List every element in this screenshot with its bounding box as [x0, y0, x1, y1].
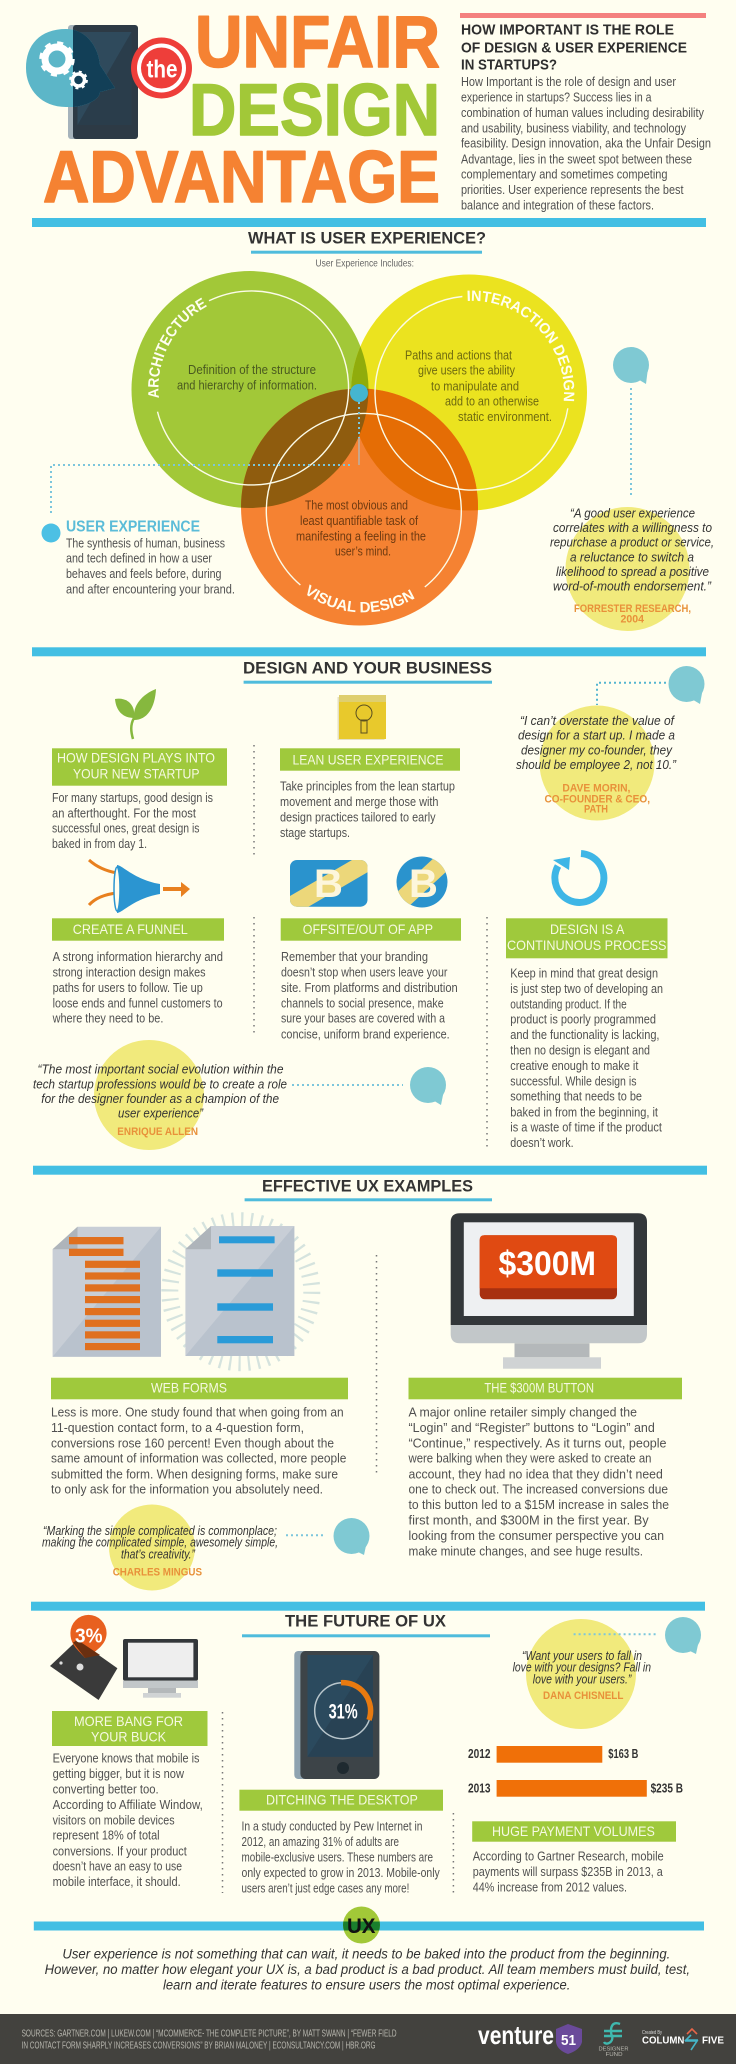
quote: dana chisnell: DANA CHISNELL [543, 1690, 624, 1702]
block: offsite out of app: channels to social presence, make [281, 996, 444, 1010]
intro text: experience in startups? Success lies in a [461, 90, 652, 104]
quote: dave morin: “I can’t overstate the value of [520, 714, 675, 728]
quote: dave morin: design for a start up. I made a [518, 729, 675, 743]
logo: column five: COLUMN [642, 2034, 684, 2046]
block: web forms: same amount of information was collected, more people [51, 1452, 346, 1466]
text: interaction [405, 348, 552, 424]
block: the $300M button: make minute changes, and see huge results. [408, 1544, 643, 1558]
block: create a funnel [52, 918, 224, 1026]
block: design is a continuous process: outstanding product. If the [510, 997, 627, 1011]
intro heading: OF DESIGN & USER EXPERIENCE [461, 39, 687, 56]
text: architecture: and hierarchy of information. [177, 378, 317, 392]
block: huge payment volumes: According to Gartner Research, mobile [473, 1850, 664, 1864]
panel: effective ux examples [33, 1166, 707, 1590]
intro text [461, 75, 711, 212]
block: design is a continuous process: successful. While design is [510, 1074, 636, 1088]
block: create a funnel: where they need to be. [52, 1012, 163, 1026]
label: architecture: ARCHITECTURE [148, 298, 207, 398]
heading: THE FUTURE OF UX [285, 1613, 446, 1631]
block: offsite out of app: doesn’t stop when users leave your [281, 966, 447, 980]
icon: b card and b circle [290, 856, 448, 908]
block: design is a continuous process: doesn’t work. [510, 1136, 574, 1150]
heading [242, 1613, 490, 1637]
bar chart: payment volumes: $163 B [608, 1747, 638, 1761]
block: the $300M button: were balking when they were asked to create an [408, 1452, 652, 1466]
block: design is a continuous process: creative enough to make it [510, 1059, 639, 1073]
quote: forrester research: word-of-mouth endorsement.” [553, 580, 712, 594]
icon: ux badge [343, 1906, 380, 1944]
quote: dave morin: designer my co-founder, they [521, 743, 673, 757]
block: design is a continuous process: something that needs to be [510, 1090, 642, 1104]
callout: user experience: and after encountering your brand. [66, 582, 235, 596]
block: design is a continuous process: DESIGN IS A [550, 921, 625, 937]
block: web forms [51, 1378, 348, 1497]
block: the $300M button: “Login” and “Register” buttons to “Login” and [408, 1421, 655, 1435]
quote: forrester research: “A good user experience [570, 506, 695, 520]
block: web forms: conversions rose 160 percent! Even though about the [51, 1436, 334, 1450]
title [43, 2, 440, 218]
block: more bang for your buck: visitors on mobile devices [53, 1813, 175, 1827]
block: more bang for your buck [52, 1711, 208, 1889]
icon: leaf [115, 689, 156, 739]
panel: what is user experience [32, 218, 714, 631]
block: design is a continuous process: then no design is elegant and [510, 1044, 650, 1058]
quote: enrique allen: user experience” [118, 1107, 204, 1121]
block: design is a continuous process: is a waste of time if the product [510, 1121, 662, 1135]
text: interaction: give users the ability [418, 364, 516, 378]
title: UNFAIR [195, 2, 440, 83]
block: web forms: 11-question contact form, to a 4-question form, [51, 1421, 304, 1435]
block: create a funnel: paths for users to follow. Tie up [53, 981, 203, 995]
block: the $300M button: “Continue,” respectively. As it turns out, people [408, 1436, 666, 1450]
quote: dana chisnell: love with your designs? Fall in [513, 1661, 651, 1675]
block: ditching the desktop: DITCHING THE DESKTOP [266, 1792, 418, 1808]
quote: charles mingus: making the complicated simple, awesomely simple, [42, 1536, 278, 1550]
icon: b card and b circle: B [314, 862, 343, 906]
quote: enrique allen: ENRIQUE ALLEN [117, 1126, 198, 1138]
closing text: However, no matter how elegant your UX is, a bad product is a bad product. All team members must build, test, [45, 1962, 690, 1977]
logo: designer fund: FUND [606, 2052, 623, 2058]
block: more bang for your buck: MORE BANG FOR [74, 1713, 183, 1729]
text: visual: manifesting a feeling in the [296, 529, 426, 543]
block: lean user experience: movement and merge those with [280, 795, 438, 809]
callout: user experience [42, 465, 350, 596]
block: design is a continuous process: CONTINUNOUS PROCESS [507, 937, 666, 953]
block: ditching the desktop: users aren’t just edge cases any more! [242, 1881, 409, 1895]
block: more bang for your buck: converting better too. [53, 1783, 159, 1797]
icon: cycle arrow [553, 854, 604, 902]
icon: light bulb note [338, 695, 386, 740]
block: offsite out of app: Remember that your branding [281, 950, 428, 964]
block: create a funnel: CREATE A FUNNEL [73, 921, 188, 937]
heading [245, 1178, 492, 1201]
heading: DESIGN AND YOUR BUSINESS [243, 659, 492, 677]
block: more bang for your buck: conversions. If your product [53, 1844, 187, 1858]
quote: dave morin: CO-FOUNDER & CEO, [544, 794, 650, 806]
icon: the badge [131, 38, 192, 98]
quote: forrester research: 2004 [620, 613, 644, 625]
closing text [45, 1947, 690, 1992]
icon: the badge: the [146, 55, 178, 83]
quote: enrique allen: tech startup professions would be to create a role [33, 1077, 287, 1091]
block: the $300M button [408, 1378, 682, 1558]
quote: dave morin: PATH [584, 804, 608, 816]
label: visual design: VISUAL DESIGN [307, 584, 414, 612]
block: offsite out of app: site. From platforms and distribution [281, 981, 458, 995]
block: the $300M button: first month, and $300M in the first year. By [408, 1513, 649, 1527]
text: architecture [177, 363, 317, 392]
block: how design plays: baked in from day 1. [52, 837, 147, 851]
quote: dana chisnell: “Want your users to fall in [522, 1649, 642, 1663]
logo: column five: Created By [642, 2030, 662, 2036]
callout: user experience: behaves and feels before, during [66, 567, 222, 581]
quote: forrester research: repurchase a product or service, [550, 536, 714, 550]
block: lean user experience: LEAN USER EXPERIENCE [292, 751, 444, 767]
panel: design and your business [32, 647, 706, 1150]
quote: forrester research: a reluctance to switch a [570, 550, 694, 564]
block: huge payment volumes: 44% increase from 2012 values. [473, 1880, 627, 1894]
block: offsite out of app: sure your bases are covered with a [281, 1012, 445, 1026]
callout: user experience: USER EXPERIENCE [66, 518, 200, 535]
icon: monitor with $300M button: $300M [498, 1245, 596, 1283]
text: architecture: Definition of the structure [188, 363, 316, 377]
block: more bang for your buck: Everyone knows that mobile is [53, 1752, 199, 1766]
block: lean user experience: design practices tailored to early [280, 811, 436, 825]
block: more bang for your buck: mobile interface, it should. [53, 1875, 181, 1889]
block: web forms: submitted the form. When designing forms, make sure [51, 1467, 338, 1481]
intro text: How Important is the role of design and user [461, 75, 676, 89]
heading: EFFECTIVE UX EXAMPLES [262, 1178, 473, 1196]
block: the $300M button: account, they had no idea that they didn’t need [408, 1467, 663, 1481]
quote: dave morin: DAVE MORIN, [562, 783, 630, 795]
block: more bang for your buck: getting bigger, but it is now [53, 1767, 185, 1781]
block: offsite out of app [281, 918, 461, 1041]
block: more bang for your buck: doesn’t have an easy to use [53, 1860, 182, 1874]
icon: ux badge: UX [347, 1915, 376, 1938]
logo: venture 51: venture [478, 2020, 554, 2050]
block: ditching the desktop: 2012, an amazing 31% of adults are [242, 1835, 399, 1849]
icon: tilted phone with 3% pin: 3% [75, 1626, 103, 1648]
block: huge payment volumes [472, 1821, 676, 1894]
block: the $300M button: one to check out. The increased conversions due [408, 1483, 668, 1497]
quote: forrester research: correlates with a willingness to [553, 521, 712, 535]
block: design is a continuous process [506, 918, 668, 1150]
block: offsite out of app: concise, uniform brand experience. [281, 1027, 450, 1041]
intro heading: IN STARTUPS? [461, 57, 557, 74]
block: create a funnel: strong interaction design makes [53, 966, 206, 980]
logo: venture 51: 51 [561, 2032, 576, 2049]
quote: forrester research [550, 347, 714, 631]
block: the $300M button: looking from the consumer perspective you can [408, 1529, 664, 1543]
intro text: Advantage, lies in the sweet spot between these [461, 152, 692, 166]
intro heading [461, 22, 687, 74]
heading: WHAT IS USER EXPERIENCE? [248, 230, 486, 248]
block: lean user experience [280, 748, 460, 840]
panel: the future of ux [31, 1602, 705, 1895]
block: more bang for your buck: YOUR BUCK [91, 1729, 167, 1745]
sources: IN CONTACT FORM SHARPLY INCREASES CONVERSIONS” BY BRIAN MALONEY | ECONSULTANCY.COM | HBR.ORG [22, 2040, 376, 2051]
block: huge payment volumes: payments will surpass $235B in 2013, a [473, 1865, 663, 1879]
text: interaction: add to an otherwise [445, 395, 539, 409]
venn diagram [132, 271, 587, 626]
quote: charles mingus: CHARLES MINGUS [113, 1566, 202, 1578]
text: interaction: Paths and actions that [405, 348, 512, 362]
quote: dave morin [516, 666, 704, 820]
quote: charles mingus: that’s creativity.” [121, 1547, 196, 1561]
block: create a funnel: loose ends and funnel customers to [53, 996, 223, 1010]
accent bar [460, 13, 706, 18]
icon: funnel [89, 860, 190, 913]
text: visual: The most obvious and [305, 498, 408, 512]
quote: dave morin: should be employee 2, not 10.” [516, 758, 677, 772]
quote: charles mingus [42, 1504, 370, 1590]
block: ditching the desktop: In a study conducted by Pew Internet in [242, 1820, 422, 1834]
logo: designer fund [598, 2023, 629, 2058]
block: lean user experience: Take principles from the lean startup [280, 780, 455, 794]
block: the $300M button: THE $300M BUTTON [484, 1380, 594, 1396]
icon: phone with 31% gauge: 31% [329, 1700, 358, 1723]
block: the $300M button: to this button led to a $15M increase in sales the [408, 1498, 669, 1512]
block: web forms: WEB FORMS [151, 1380, 227, 1396]
block: ditching the desktop [239, 1790, 443, 1895]
block: ditching the desktop: only expected to grow in 2013. Mobile-only [242, 1866, 440, 1880]
closing text: learn and iterate features to ensure users the most optimal experience. [163, 1977, 570, 1992]
quote: enrique allen: for the designer founder as a champion of the [41, 1092, 279, 1106]
block: design is a continuous process: and the functionality is lacking, [510, 1028, 660, 1042]
icon: tilted phone with 3% pin [50, 1615, 117, 1700]
block: how design plays: successful ones, great design is [52, 822, 200, 836]
quote: enrique allen: “The most important social evolution within the [38, 1062, 284, 1076]
icon: phone with 31% gauge [294, 1651, 379, 1779]
intro text: and usability, business viability, and technology [461, 121, 687, 135]
block: lean user experience: stage startups. [280, 826, 350, 840]
logo: designer fund: DESIGNER [598, 2047, 629, 2053]
text: visual [296, 498, 426, 559]
block: how design plays: HOW DESIGN PLAYS INTO [57, 750, 215, 766]
quote: charles mingus: “Marking the simple complicated is commonplace; [43, 1524, 277, 1538]
block: web forms: to only ask for the information you absolutely need. [51, 1483, 323, 1497]
title: DESIGN [189, 70, 440, 151]
block: how design plays: YOUR NEW STARTUP [73, 765, 200, 781]
sources [22, 2029, 397, 2051]
text: interaction: to manipulate and [431, 379, 519, 393]
quote: dana chisnell: love with your users.” [533, 1672, 632, 1686]
bar chart: payment volumes: 2013 [468, 1781, 491, 1795]
block: create a funnel: A strong information hierarchy and [53, 950, 223, 964]
logo: column five: FIVE [702, 2034, 724, 2046]
callout: user experience: The synthesis of human, business [66, 536, 225, 550]
block: design is a continuous process: is just step two of developing an [510, 982, 663, 996]
quote: enrique allen [33, 1040, 446, 1150]
subheading: User Experience Includes: [316, 258, 414, 270]
text: visual: least quantifiable task of [300, 514, 418, 528]
block: more bang for your buck: According to Affiliate Window, [53, 1798, 203, 1812]
panel: header [26, 2, 711, 218]
quote: dana chisnell [513, 1617, 701, 1729]
closing text: User experience is not something that can wait, it needs to be baked into the product from the beginning. [62, 1947, 670, 1962]
icon: head and phone with gears [26, 25, 138, 139]
block: design is a continuous process: Keep in mind that great design [510, 966, 658, 980]
text: visual: user’s mind. [335, 545, 391, 559]
block: how design plays: an afterthought. For the most [52, 806, 196, 820]
quote: forrester research: FORRESTER RESEARCH, [574, 603, 691, 615]
sources: SOURCES: GARTNER.COM | LUKEW.COM | “MCOMMERCE- THE COMPLETE PICTURE”, BY MATT SWANN | “FEWER FIELD [22, 2029, 397, 2040]
label: interaction design: INTERACTION DESIGN [468, 290, 574, 402]
title: ADVANTAGE [43, 137, 440, 218]
intro heading: HOW IMPORTANT IS THE ROLE [461, 22, 674, 39]
bar chart: payment volumes [468, 1746, 683, 1797]
icon: monitor with $300M button [451, 1213, 647, 1369]
block: more bang for your buck: represent 18% of total [53, 1829, 160, 1843]
block: how design plays [52, 748, 227, 851]
icon: b card and b circle: B [409, 862, 438, 906]
block: design is a continuous process: baked in from the beginning, it [510, 1105, 658, 1119]
icon: web form documents [53, 1221, 312, 1363]
logo: column five [642, 2029, 724, 2050]
block: offsite out of app: OFFSITE/OUT OF APP [303, 921, 433, 937]
callout: user experience: and tech defined in how a user [66, 552, 212, 566]
block: ditching the desktop: mobile-exclusive users. These numbers are [242, 1851, 433, 1865]
footer [0, 2014, 736, 2064]
intro text: balance and integration of these factors. [461, 198, 654, 212]
bar chart: payment volumes: $235 B [651, 1781, 683, 1795]
quote: forrester research: likelihood to spread a positive [556, 565, 709, 579]
block: huge payment volumes: HUGE PAYMENT VOLUMES [492, 1823, 655, 1839]
block: design is a continuous process: product is poorly programmed [510, 1013, 656, 1027]
bar chart: payment volumes: 2012 [468, 1747, 491, 1761]
text: interaction: static environment. [458, 410, 552, 424]
intro text: priorities. User experience represents the best [461, 183, 684, 197]
block: web forms: Less is more. One study found that when going from an [51, 1406, 344, 1420]
intro text: combination of human values including desirability [461, 106, 705, 120]
intro text: complementary and sometimes competing [461, 168, 668, 182]
icon: small monitor [123, 1639, 198, 1698]
block: the $300M button: A major online retailer simply changed the [408, 1406, 637, 1420]
panel: conclusion [34, 1906, 704, 1992]
block: how design plays: For many startups, good design is [52, 791, 213, 805]
